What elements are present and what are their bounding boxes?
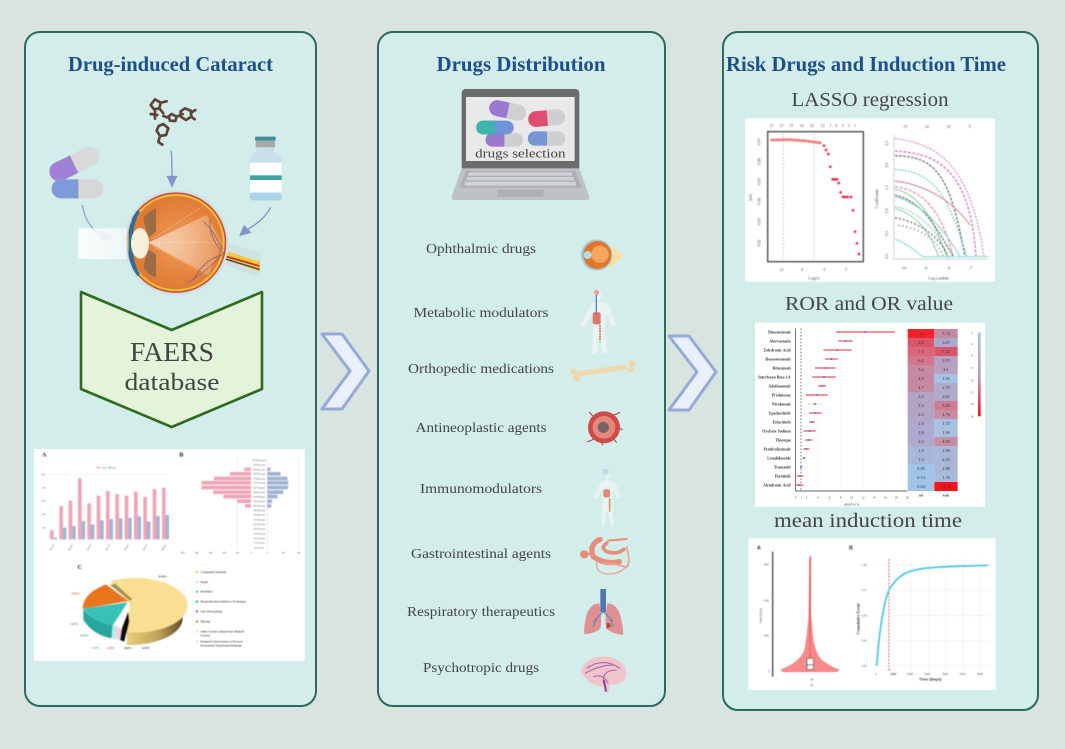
pyramid chart: age and sex: 35-40 years [253, 514, 265, 517]
pyramid chart: age and sex: 200 [297, 551, 301, 554]
forest plot: Atorvastatin [769, 338, 791, 343]
pie legend [196, 570, 246, 648]
chart panel: induction time: A [757, 545, 761, 551]
plot: AUC vs log lambda: 15 [779, 123, 783, 128]
bar chart: reports per year: 2021Q1 [142, 543, 149, 551]
heading: drugs distribution: Drugs Distribution [436, 52, 606, 76]
forest plot: 18 [895, 495, 898, 499]
forest plot: Interferon Beta-1A [758, 374, 791, 379]
plot: AUC vs log lambda: 1 [854, 123, 856, 128]
forest plot: 4 [817, 495, 819, 499]
colour scale: 2 [971, 330, 973, 334]
plot: AUC vs log lambda: 6 [835, 123, 837, 128]
plot: AUC vs log lambda: 15 [769, 123, 773, 128]
icon: bone [570, 360, 635, 382]
heatmap: 5.2 [918, 367, 924, 372]
plot: AUC vs log lambda: 14 [810, 123, 814, 128]
illustration: eye [122, 190, 262, 295]
icon: intestines [580, 539, 629, 574]
forest plot: Oxybate Sodium [762, 428, 791, 433]
cumulative curve: 0 [876, 672, 878, 676]
pyramid chart: age and sex: 400 [209, 551, 213, 554]
pyramid chart: age and sex: 95-100 years [253, 459, 266, 462]
label: orthopedic: Orthopedic medications [408, 362, 554, 377]
plot: AUC vs log lambda: 13 [821, 123, 825, 128]
pyramid chart: age and sex: 5-10 years [254, 542, 265, 545]
pyramid chart: age and sex: 75-80 years [253, 477, 265, 480]
illustration: drugs to eye [46, 99, 282, 295]
pyramid chart: age and sex: 25-30 years [253, 523, 265, 526]
arrow: left to middle [322, 334, 369, 409]
cumulative curve: 3000 [924, 672, 931, 676]
plot: coefficient paths: -8 [947, 266, 950, 271]
plot: AUC vs log lambda: 0.93 [757, 218, 762, 225]
plot: AUC vs log lambda: 15 [789, 123, 793, 128]
bar chart: reports per year: 700 [42, 486, 46, 489]
icon: metabolic body [581, 288, 616, 354]
heatmap: 4.9 [918, 376, 924, 381]
forest plot: Tramadol [774, 464, 792, 469]
panel: drugs distribution [378, 32, 665, 706]
heatmap: 5.74 [942, 331, 951, 336]
subheading: LASSO regression: LASSO regression [792, 89, 948, 111]
icon: vial [250, 137, 282, 200]
panel: risk drugs and induction time [723, 32, 1038, 710]
plot: AUC vs log lambda: 3 [842, 123, 844, 128]
plot: AUC vs log lambda: 0.94 [757, 198, 762, 205]
cumulative curve: 2000 [907, 672, 913, 676]
heading: risk drugs and induction time: Risk Drugs and Induction Time [726, 52, 1006, 76]
plot: coefficient paths: 14 [925, 124, 929, 129]
pie chart: outcomes [71, 575, 188, 650]
pyramid chart: age and sex: 65-70 years [253, 486, 265, 489]
subheading: ROR and OR value: ROR and OR value [785, 293, 953, 315]
cumulative curve: 6000 [977, 672, 983, 676]
bar chart: reports per year: Male [112, 467, 118, 469]
plot: coefficient paths: 2.0 [884, 163, 889, 168]
heatmap: 3.5 [918, 394, 924, 399]
heatmap: 3.67 [942, 340, 951, 345]
forest plot: 8 [840, 495, 842, 499]
forest plot: 14 [873, 495, 876, 499]
forest plot: OR(95%CI) [844, 502, 859, 506]
forest plot: Upadacitinib [769, 410, 791, 415]
colour scale: 14 [971, 402, 974, 406]
subheading: mean induction time: mean induction time [774, 510, 962, 532]
pyramid chart: age and sex: 90-95 years [253, 464, 265, 467]
plot: coefficient paths: 0.5 [884, 231, 889, 236]
pyramid chart: age and sex: 600 [195, 551, 199, 554]
plot: coefficient paths: 0.0 [884, 254, 889, 259]
pyramid chart: age and sex: 60-65 years [253, 491, 265, 494]
panel: drug-induced cataract [25, 32, 316, 706]
laptop label: drugs selection [475, 146, 566, 161]
pie chart: outcomes: 1.74% [107, 647, 114, 650]
heatmap: 2.61 [942, 394, 950, 399]
cumulative curve: 1000 [890, 672, 897, 676]
pyramid chart: age and sex: 0 [251, 551, 253, 554]
forest plot: 12 [862, 495, 865, 499]
plot: AUC vs log lambda: 0.96 [757, 158, 762, 165]
cumulative curve: 0.50 [862, 614, 867, 618]
plot: coefficient paths: -7 [969, 266, 972, 271]
plot: coefficient paths: 1.5 [884, 185, 889, 190]
bar chart: reports per year: 2019Q1 [124, 543, 130, 551]
forest plot: 0 [795, 495, 797, 499]
plot: coefficient paths: -9 [924, 266, 927, 271]
forest plot: Pembrolizumab [764, 446, 791, 451]
heatmap: 2.9 [918, 421, 924, 426]
heatmap: 3.97 [942, 358, 951, 363]
pie legend: Required Intervention to Prevent [200, 640, 243, 644]
violin plot: 1000 [764, 635, 770, 638]
pyramid chart: age and sex: 800 [181, 551, 185, 554]
callout: FAERS database: FAERS [130, 337, 214, 367]
plot: AUC vs log lambda: 0.95 [757, 178, 762, 185]
cumulative curve: 4000 [942, 672, 949, 676]
bar chart: reports per year: 2015Q1 [86, 543, 93, 551]
bar chart: reports per year: 2017Q1 [105, 543, 112, 551]
list: drug classes [407, 242, 555, 676]
chart panel: LASSO plots [745, 118, 995, 282]
pie legend: Hospitalization-Initial or Prolonged [200, 600, 246, 604]
pie chart: outcomes: 63.49% [158, 575, 167, 578]
forest plot: 16 [884, 495, 887, 499]
icons: drug classes [570, 239, 635, 694]
plot: AUC vs log lambda: -5 [822, 267, 826, 272]
pyramid chart: age and sex: 20-25 years [253, 528, 265, 531]
cumulative curve: ~733 [886, 668, 892, 671]
bar chart: reports per year: 500 [42, 500, 46, 503]
pyramid chart: age and sex [181, 458, 301, 554]
bar chart: reports per year: 2011Q1 [49, 543, 56, 551]
plot: coefficient paths [874, 124, 988, 280]
heatmap: 1.93 [942, 376, 950, 381]
plot: AUC vs log lambda: 14 [800, 123, 804, 128]
heading: drug-induced cataract: Drug-induced Cataract [68, 52, 273, 76]
heatmap: 3.1 [943, 367, 949, 372]
colour scale: 6 [971, 354, 973, 358]
forest plot: Dinutuximab [768, 329, 791, 334]
violin plot: 1500 [764, 599, 770, 602]
pie legend: Permanent Impairment/Damage [200, 644, 243, 648]
heatmap: 0.64 [917, 484, 926, 489]
icon: immune body [595, 467, 621, 527]
icon: brain [581, 656, 627, 694]
forest plot: Romosozumab [765, 356, 791, 361]
forest plot: 10 [850, 495, 854, 499]
heatmap: 2.75 [942, 385, 950, 390]
plot: coefficient paths: -10 [901, 266, 906, 271]
colour scale: 10 [971, 379, 974, 383]
violin plot: 2000 [764, 564, 770, 567]
bar chart: reports per year: Female [101, 467, 108, 469]
heatmap: 12 [919, 331, 923, 336]
callout: FAERS database: database [124, 370, 220, 396]
heatmap: 1.75 [942, 421, 950, 426]
icon: tumour cell [587, 411, 623, 445]
icon: capsules [46, 144, 103, 198]
colour scale [971, 330, 981, 418]
chart panel: forest plot and heatmap [755, 323, 985, 507]
forest plot: Zoledronic Acid [763, 347, 791, 352]
heatmap: 0.85 [917, 466, 925, 471]
chart panel: induction time [748, 538, 996, 690]
heatmap: 21.12 [941, 484, 951, 489]
pie chart: outcomes: 0.07% [71, 623, 79, 626]
pie legend: Missing [200, 620, 211, 624]
plot: coefficient paths: 5 [969, 124, 971, 129]
heatmap [908, 329, 958, 498]
plot: AUC vs log lambda: -11 [779, 267, 784, 272]
icon: lungs [584, 589, 623, 635]
forest plot: Alendronic Acid [763, 482, 791, 487]
heatmap: 2.03 [942, 457, 950, 462]
forest plot: 20 [906, 495, 909, 499]
heatmap: 6.4 [918, 358, 925, 363]
plot: coefficient paths: Coefficients [874, 188, 879, 208]
forest plot: 1 [801, 495, 803, 499]
chart panel: reports by year, sex and age, outcomes: C [78, 565, 82, 571]
pie chart: outcomes: 15.85% [71, 593, 80, 596]
heatmap: 2.8 [918, 430, 924, 435]
forest plot: 6 [829, 495, 831, 499]
cumulative curve: 5000 [960, 672, 966, 676]
pyramid chart: age and sex: 80-85 years [253, 473, 265, 476]
pie legend: Events) [200, 634, 210, 638]
label: ophthalmic: Ophthalmic drugs [426, 242, 536, 257]
cumulative curve [855, 558, 990, 682]
plot: coefficient paths: 10 [946, 124, 950, 129]
pie chart: outcomes: 0.10% [142, 647, 150, 650]
pie legend: Life-Threatening [200, 609, 223, 613]
heatmap: 5.26 [942, 403, 951, 408]
violin plot: 0 [768, 670, 770, 673]
heatmap: 8.9 [918, 340, 924, 345]
arrow: middle to right [669, 336, 716, 410]
heatmap: ROR [943, 494, 950, 498]
bar chart: reports per year: 300 [42, 513, 46, 516]
pie legend: Death [200, 580, 208, 584]
icon: eye [581, 239, 623, 271]
plot: coefficient paths: 2.5 [884, 141, 889, 146]
pyramid chart: age and sex: 200 [223, 551, 227, 554]
bar chart: reports per year: 900 [42, 474, 46, 477]
chart panel: reports by year, sex and age, outcomes [34, 449, 305, 661]
plot: AUC vs log lambda [748, 123, 863, 280]
pyramid chart: age and sex: 0 [267, 551, 269, 554]
heatmap: 1.98 [942, 448, 950, 453]
label: immunomodulators: Immunomodulators [420, 482, 542, 497]
bar chart: reports per year: 2023Q1 [161, 543, 168, 551]
forest plot: Rituximab [773, 365, 791, 370]
arrow: vial to eye [239, 207, 271, 236]
colour scale: 16 [971, 414, 974, 418]
light beam [78, 228, 127, 259]
plot: AUC vs log lambda: 3 [848, 123, 850, 128]
cumulative curve: 0.25 [862, 639, 867, 643]
violin plot: Time (Days) [759, 608, 763, 623]
cumulative curve: Cumulative Event [855, 603, 860, 634]
label: metabolic: Metabolic modulators [414, 306, 548, 321]
pyramid chart: age and sex: 100 [282, 551, 286, 554]
pyramid chart: age and sex: 50-55 years [253, 500, 265, 503]
plot: AUC vs log lambda: 7 [829, 123, 831, 128]
forest plot [758, 328, 909, 506]
chart panel: reports by year, sex and age, outcomes: A [42, 452, 47, 458]
pyramid chart: age and sex: 45-50 years [253, 505, 265, 508]
heatmap: 2.2 [918, 439, 924, 444]
forest plot: Lenalidomide [767, 455, 791, 460]
pyramid chart: age and sex: 100 [236, 551, 240, 554]
pie legend: Disability [200, 590, 213, 594]
plot: coefficient paths: 15 [903, 124, 907, 129]
forest plot: Thiotepa [775, 437, 791, 442]
heatmap: 7.22 [942, 349, 950, 354]
plot: AUC vs log lambda: 0.97 [757, 138, 762, 145]
pie chart: outcomes: 14.76% [80, 634, 89, 637]
label: respiratory: Respiratory therapeutics [407, 605, 555, 620]
colour scale: 12 [971, 390, 974, 394]
label: gastrointestinal: Gastrointestinal agents [411, 547, 551, 562]
cumulative curve: 1.00 [862, 563, 867, 567]
plot: coefficient paths: 1.0 [884, 208, 889, 213]
violin plot: All [810, 679, 814, 682]
heatmap: 4.58 [942, 439, 950, 444]
pyramid chart: age and sex: 30-35 years [253, 518, 265, 521]
pyramid chart: age and sex: 40-45 years [253, 509, 265, 512]
pyramid chart: age and sex: 85-90 years [253, 468, 265, 471]
plot: AUC vs log lambda: 0.92 [757, 240, 762, 247]
heatmap: 1.3 [918, 457, 924, 462]
forest plot: Ibrutinib [775, 473, 791, 478]
label: antineoplastic: Antineoplastic agents [416, 421, 546, 436]
icon: molecule [151, 99, 195, 145]
pyramid chart: age and sex: 55-60 years [253, 495, 265, 498]
cumulative curve: Time (Days) [919, 677, 942, 682]
heatmap: 1.9 [918, 448, 924, 453]
pie legend: Congenital Anomaly [200, 570, 227, 574]
heatmap: 4.76 [942, 412, 951, 417]
heatmap: 1.94 [942, 430, 951, 435]
pyramid chart: age and sex: 70-75 years [253, 482, 265, 485]
plot: AUC vs log lambda: -7 [844, 267, 847, 272]
pie legend: Other Serious (Important Medical [200, 630, 244, 634]
forest plot: Tofacitinib [772, 419, 791, 424]
forest plot: Prednisone [772, 392, 791, 397]
heatmap: OR [919, 494, 924, 498]
heatmap: 3.4 [918, 412, 925, 417]
pie chart: outcomes: 0.64% [124, 647, 132, 650]
pyramid chart: age and sex: 15-20 years [253, 532, 265, 535]
pyramid chart: age and sex: 0-5 years [255, 546, 264, 549]
colour scale: 4 [971, 342, 973, 346]
label: psychotropic: Psychotropic drugs [423, 661, 539, 676]
heatmap: 1.76 [942, 475, 951, 480]
violin plot: All [810, 684, 814, 687]
pie chart: outcomes: 1.37% [92, 647, 99, 650]
cumulative curve: 0.00 [862, 664, 867, 668]
violin plot [759, 552, 839, 687]
plot: AUC vs log lambda: Log(λ) [808, 275, 820, 280]
chart panel: reports by year, sex and age, outcomes: B [179, 452, 183, 458]
bar chart: reports per year: 2013Q1 [68, 543, 74, 551]
plot: AUC vs log lambda: AUC [748, 193, 753, 202]
colour scale: 8 [971, 366, 973, 370]
arrow: molecule to eye [167, 151, 177, 187]
forest plot: 2 [806, 495, 808, 499]
forest plot: Nivolumab [772, 401, 791, 406]
heatmap: 0.74 [917, 475, 926, 480]
heatmap: 1.88 [942, 466, 950, 471]
heatmap: 7.3 [918, 349, 924, 354]
icon: laptop with capsules [452, 89, 589, 200]
pyramid chart: age and sex: 10-15 years [253, 537, 265, 540]
callout: FAERS database [81, 292, 262, 427]
bar chart: reports per year: 100 [42, 526, 46, 529]
cumulative curve: 0.75 [862, 588, 867, 592]
bar chart: reports per year [42, 467, 169, 551]
forest plot: Adalimumab [768, 383, 791, 388]
plot: coefficient paths: Log Lambda [928, 275, 949, 280]
plot: AUC vs log lambda: -9 [800, 267, 803, 272]
chart panel: induction time: B [849, 545, 853, 551]
arrow: capsule to eye [82, 205, 113, 241]
heatmap: 3.3 [918, 403, 924, 408]
heatmap: 4.7 [918, 385, 925, 390]
